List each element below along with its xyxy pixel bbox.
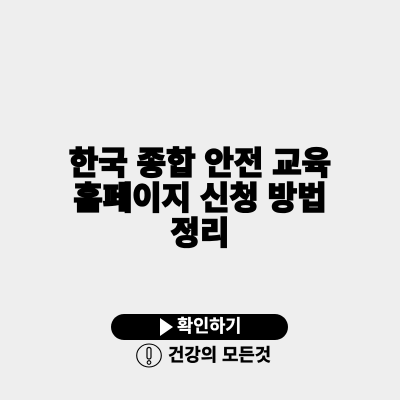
title: [69, 145, 331, 251]
brand name: 건강의 모든것: [168, 345, 271, 365]
button: confirm: [111, 314, 288, 340]
title: 정리: [171, 215, 229, 251]
title: 한국 종합 안전 교육: [69, 145, 331, 181]
brand row: [136, 344, 271, 368]
icon: exclamation circle: [136, 344, 162, 368]
button label: 확인하기: [177, 316, 241, 336]
icon: play triangle: [160, 318, 173, 336]
title: 홈페이지 신청 방법: [73, 180, 327, 216]
